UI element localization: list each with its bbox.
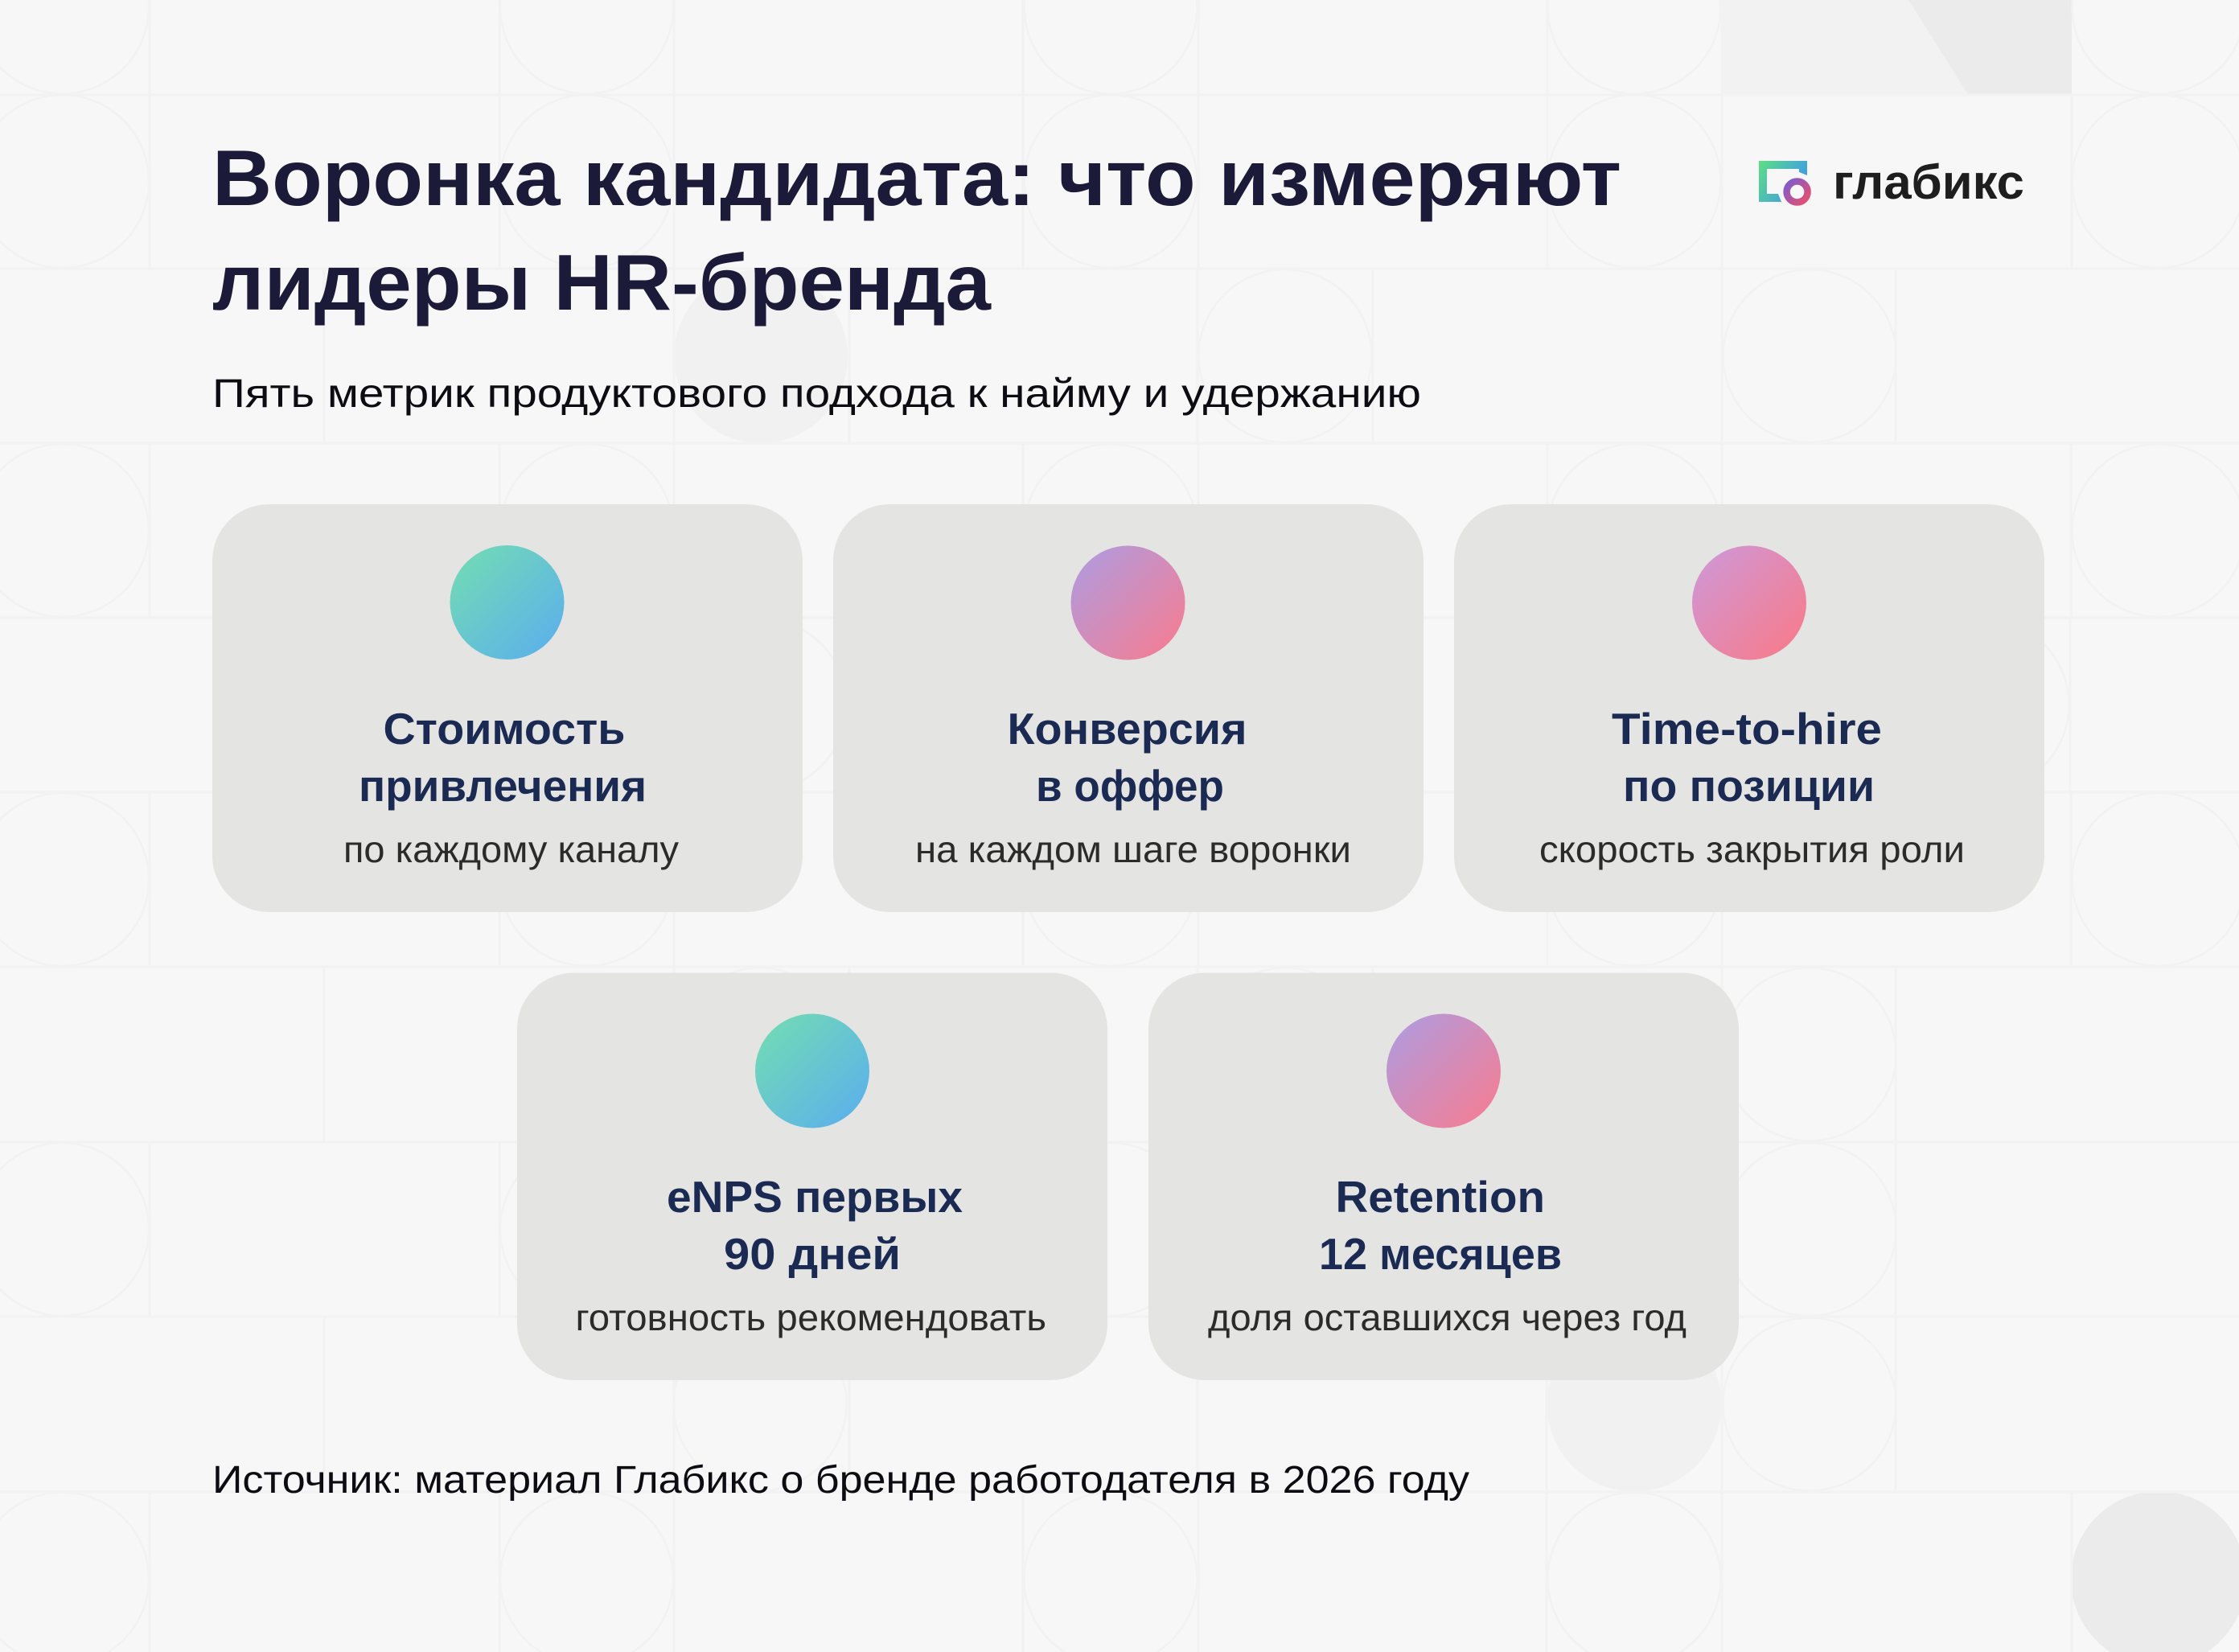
panel: offer conversion xyxy=(833,504,1424,912)
card description: готовность рекомендовать xyxy=(576,1297,1046,1338)
card heading xyxy=(1007,704,1247,811)
icon: pink circle xyxy=(1692,545,1806,660)
card heading: Стоимость xyxy=(383,704,626,754)
card heading: Конверсия xyxy=(1007,704,1247,754)
icon: purple circle xyxy=(1387,1013,1501,1128)
icon: teal circle xyxy=(755,1013,869,1128)
card heading xyxy=(1319,1172,1562,1279)
logo wordmark: глабикс xyxy=(1833,155,2024,209)
panel: acquisition cost xyxy=(212,504,803,912)
logo: Глабикс xyxy=(1759,155,2024,209)
card heading xyxy=(359,704,647,811)
card heading: привлечения xyxy=(359,761,647,811)
subtitle: Пять метрик продуктового подхода к найму и удержанию xyxy=(212,371,1421,416)
icon: teal circle xyxy=(450,545,565,660)
card heading xyxy=(1612,704,1882,811)
icon: logo mark xyxy=(1759,161,1808,203)
card heading: Retention xyxy=(1335,1172,1545,1222)
panel: eNPS xyxy=(517,973,1107,1380)
source note: Источник: материал Глабикс о бренде работодателя в 2026 году xyxy=(212,1459,1469,1502)
icon: purple circle xyxy=(1071,545,1185,660)
card heading xyxy=(667,1172,963,1279)
card heading: в оффер xyxy=(1036,761,1224,811)
panel: time-to-hire xyxy=(1454,504,2044,912)
title xyxy=(212,134,1621,327)
title: Воронка кандидата: что измеряют xyxy=(212,134,1621,222)
card description: на каждом шаге воронки xyxy=(915,828,1351,870)
panel: retention xyxy=(1148,973,1739,1380)
card description: скорость закрытия роли xyxy=(1539,828,1965,870)
card description: доля оставшихся через год xyxy=(1208,1297,1686,1338)
card heading: 12 месяцев xyxy=(1319,1229,1562,1279)
card heading: eNPS первых xyxy=(667,1172,963,1222)
card heading: по позиции xyxy=(1623,761,1875,811)
card heading: Time-to-hire xyxy=(1612,704,1882,754)
title: лидеры HR-бренда xyxy=(212,238,992,327)
card description: по каждому каналу xyxy=(343,828,679,870)
card heading: 90 дней xyxy=(724,1229,901,1279)
